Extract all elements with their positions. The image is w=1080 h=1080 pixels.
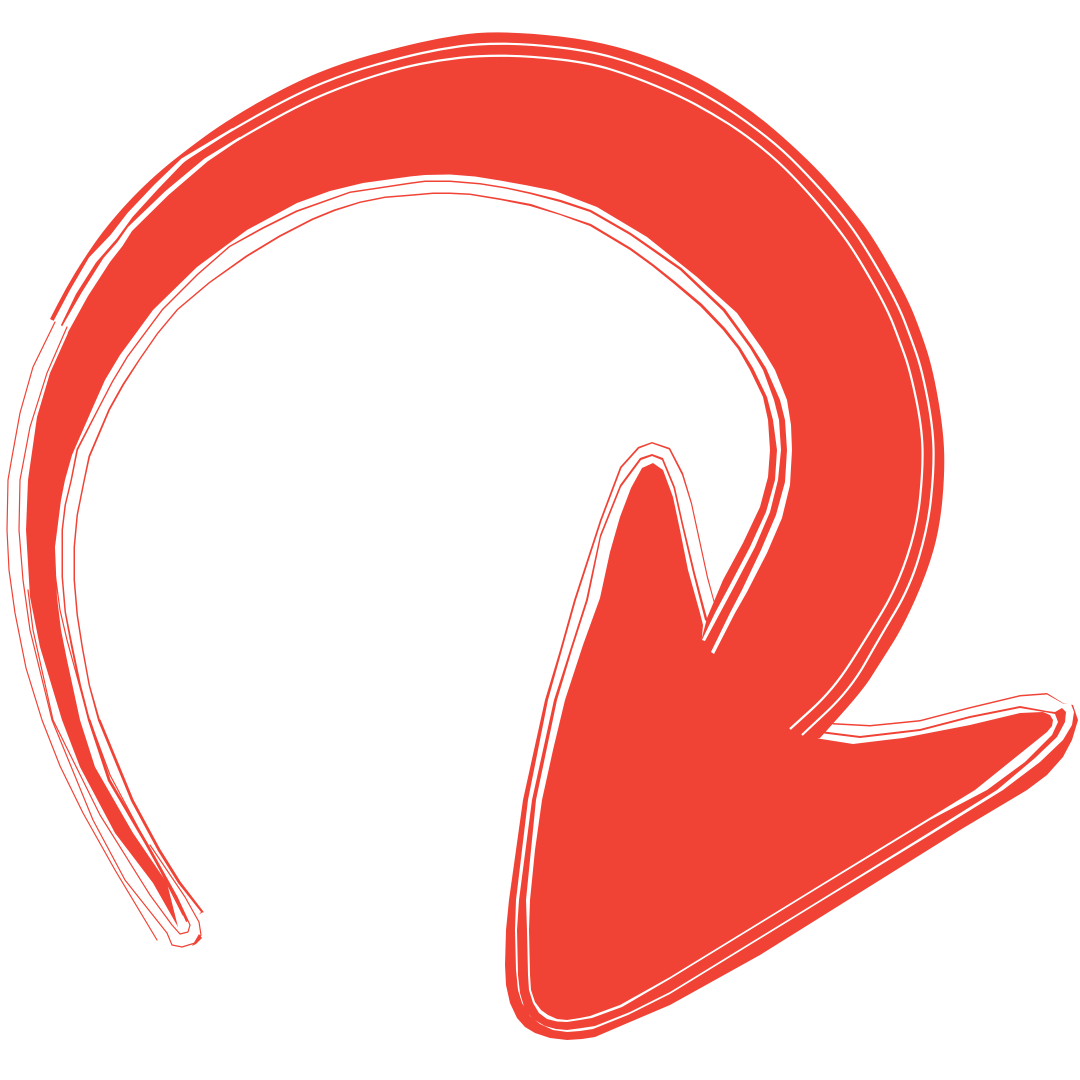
arrowhead outer band [505, 442, 1078, 1040]
white gap between the two inner hairlines [63, 182, 781, 925]
inner hairline end [100, 720, 203, 912]
arc solid fill [26, 32, 944, 927]
outer hairline [7, 322, 157, 940]
inner white groove [148, 56, 923, 729]
second hairline with tail loop [19, 327, 201, 947]
white gap between core and middle hairline [55, 174, 792, 927]
outer white groove [143, 44, 934, 735]
arrowhead with nested outline bands [505, 442, 1078, 1040]
arrowhead solid core [529, 463, 1053, 1020]
sweeping arc body of the arrow [26, 32, 944, 927]
middle hairline end [90, 720, 190, 925]
inner groove, tapered left end [60, 137, 240, 334]
tail blob [192, 934, 202, 946]
tail hairlines [7, 322, 203, 947]
third hairline [28, 590, 190, 934]
fourth hairline beside core [55, 573, 183, 915]
arrowhead middle band [517, 454, 1066, 1030]
outer groove, tapered left end [53, 128, 234, 327]
